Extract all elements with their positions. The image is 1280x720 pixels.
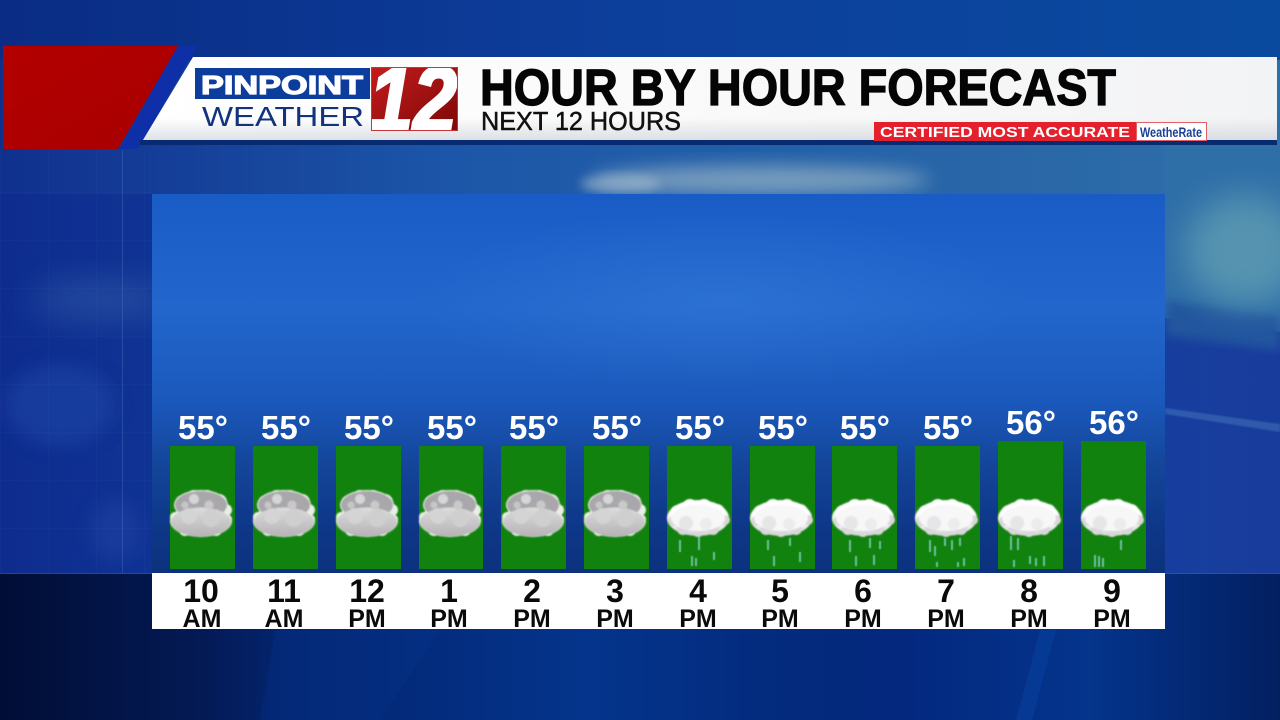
certified badge: WeatheRate: [1140, 124, 1202, 140]
label: 7 PM: 7: [937, 573, 955, 609]
label: 12 PM: PM: [348, 605, 386, 633]
label: 4 PM: 4: [689, 573, 707, 609]
hour: 2 PM: [501, 409, 566, 569]
label: 3 PM: [596, 573, 634, 633]
hour: 11 AM: 55°: [261, 409, 311, 446]
hour: 3 PM: [584, 409, 649, 569]
hour: 9 PM: 56°: [1089, 404, 1139, 441]
hour: 4 PM: [667, 409, 732, 569]
label: 12 PM: 12: [349, 573, 385, 609]
label: 6 PM: PM: [844, 605, 882, 633]
label: 7 PM: PM: [927, 605, 965, 633]
title: HOUR BY HOUR FORECAST: [480, 59, 1116, 116]
label: 5 PM: PM: [761, 605, 799, 633]
label: 8 PM: 8: [1020, 573, 1038, 609]
label: 11 AM: 11: [267, 573, 301, 609]
hour: 12 PM: 55°: [344, 409, 394, 446]
label: 12 PM: [348, 573, 386, 633]
hour: 6 PM: 55°: [840, 409, 890, 446]
hour: 1 PM: 55°: [427, 409, 477, 446]
label: 11 AM: AM: [265, 605, 303, 633]
hour: 8 PM: [998, 404, 1063, 569]
label: 8 PM: [1010, 573, 1048, 633]
label: 6 PM: 6: [854, 573, 872, 609]
hour: 10 AM: [170, 409, 235, 569]
certified badge: CERTIFIED MOST ACCURATE: [880, 124, 1130, 141]
label: 3 PM: PM: [596, 605, 634, 633]
hour: 10 AM: 55°: [178, 409, 228, 446]
logo: Pinpoint Weather: PINPOINT: [201, 70, 363, 100]
label: 7 PM: [927, 573, 965, 633]
label: 1 PM: PM: [430, 605, 468, 633]
hour: 5 PM: [750, 409, 815, 569]
logo: 12: 12: [369, 49, 457, 151]
label: 1 PM: 1: [440, 573, 458, 609]
label: 4 PM: [679, 573, 717, 633]
label: 2 PM: 2: [523, 573, 541, 609]
label: 4 PM: PM: [679, 605, 717, 633]
label: 6 PM: [844, 573, 882, 633]
hour: 12 PM: [336, 409, 401, 569]
hour: 7 PM: 55°: [923, 409, 973, 446]
hour: 2 PM: 55°: [509, 409, 559, 446]
logo: Pinpoint Weather: [195, 68, 370, 132]
label: 11 AM: [265, 573, 303, 633]
label: 5 PM: 5: [771, 573, 789, 609]
hour: 5 PM: 55°: [758, 409, 808, 446]
label: 10 AM: AM: [183, 605, 221, 633]
hour: 8 PM: 56°: [1006, 404, 1056, 441]
label: 2 PM: PM: [513, 605, 551, 633]
label: 9 PM: [1093, 573, 1131, 633]
hour: 11 AM: [253, 409, 318, 569]
hour: 7 PM: [915, 409, 980, 569]
time axis strip: [152, 573, 1165, 633]
hourly chart: [170, 404, 1146, 569]
label: 8 PM: PM: [1010, 605, 1048, 633]
label: 5 PM: [761, 573, 799, 633]
banner: [3, 46, 1277, 151]
logo: 12: [371, 67, 458, 131]
label: 2 PM: [513, 573, 551, 633]
label: 9 PM: PM: [1093, 605, 1131, 633]
label: 3 PM: 3: [606, 573, 624, 609]
red parallelogram: [3, 46, 178, 149]
label: 10 AM: 10: [183, 573, 219, 609]
label: 10 AM: [183, 573, 221, 633]
hour: 1 PM: [419, 409, 483, 569]
blue slash: [119, 46, 197, 149]
hour: 3 PM: 55°: [592, 409, 642, 446]
white title strip: [143, 57, 1277, 140]
logo: Pinpoint Weather: WEATHER: [202, 101, 364, 132]
hour: 4 PM: 55°: [675, 409, 725, 446]
hour: 6 PM: [832, 409, 897, 569]
hour: 9 PM: [1081, 404, 1146, 569]
forecast panel: [152, 194, 1165, 573]
subtitle: NEXT 12 HOURS: [481, 106, 681, 136]
label: 1 PM: [430, 573, 468, 633]
label: 9 PM: 9: [1103, 573, 1121, 609]
certified badge: [874, 122, 1206, 141]
